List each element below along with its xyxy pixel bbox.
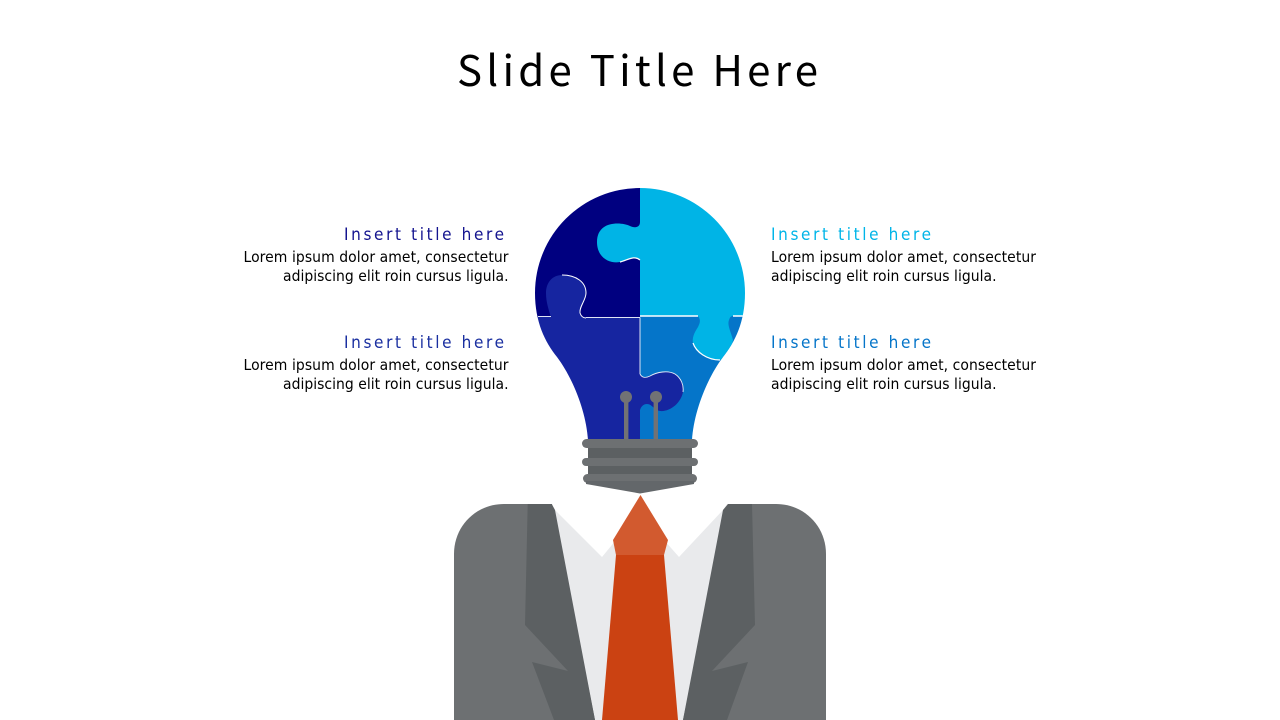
text block: top right: [771, 225, 1036, 285]
necktie: [602, 495, 678, 720]
text block: bottom right: Insert title here: [771, 333, 931, 353]
text block: top left: [244, 225, 509, 285]
suit jacket: [454, 504, 826, 720]
shirt collar: [550, 500, 730, 557]
icon: puzzle light bulb: [530, 185, 750, 442]
title: Slide Title Here: [457, 38, 818, 99]
text block: top left: Insert title here: [344, 225, 504, 245]
text block: top right: Insert title here: [771, 225, 931, 245]
icon: bulb screw base: [582, 439, 698, 494]
icon: bulb filaments: [620, 391, 662, 441]
text block: bottom right: adipiscing elit roin cursus ligula.: [771, 375, 996, 393]
text block: top right: Lorem ipsum dolor amet, consectetur: [771, 248, 1036, 266]
text block: bottom left: Lorem ipsum dolor amet, consectetur: [244, 356, 509, 374]
left lapel: [525, 504, 595, 720]
text block: top left: Lorem ipsum dolor amet, consectetur: [244, 248, 509, 266]
text block: bottom right: Lorem ipsum dolor amet, consectetur: [771, 356, 1036, 374]
shirt: [552, 504, 728, 720]
text block: bottom left: Insert title here: [344, 333, 504, 353]
text block: bottom left: adipiscing elit roin cursus ligula.: [283, 375, 508, 393]
text block: top left: adipiscing elit roin cursus ligula.: [283, 267, 508, 285]
text block: top right: adipiscing elit roin cursus ligula.: [771, 267, 996, 285]
right lapel: [683, 504, 755, 720]
text block: bottom right: [771, 333, 1036, 393]
text block: bottom left: [244, 333, 509, 393]
